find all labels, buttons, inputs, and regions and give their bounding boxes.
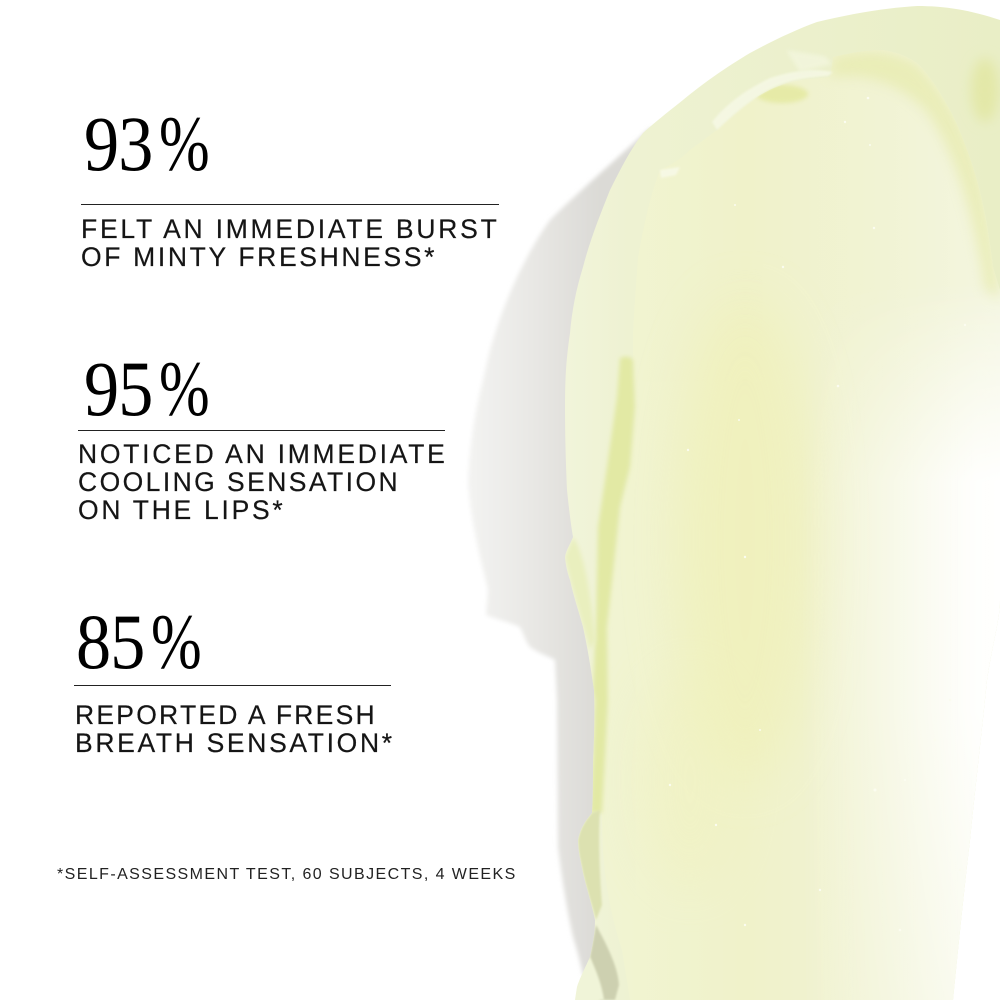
- percent sign: %: [151, 598, 202, 685]
- stat: 93%: [81, 100, 500, 272]
- number 95: 95: [84, 345, 152, 432]
- balm body: [550, 0, 1000, 1000]
- white highlight: [835, 336, 1000, 1000]
- lower side drip: [578, 810, 602, 920]
- left fold: [590, 357, 635, 813]
- number 85: 85: [76, 598, 144, 685]
- inner smear: [652, 52, 1000, 1000]
- cast shadow: [468, 128, 660, 975]
- bottom reflection: [590, 925, 619, 1000]
- lower left drip: [565, 537, 596, 650]
- label: NOTICED AN IMMEDIATE: [78, 439, 448, 469]
- lip highlight: [712, 70, 833, 130]
- sparkles: [669, 97, 966, 931]
- outer rim: [550, 0, 1000, 1000]
- yellow patch top right: [971, 58, 999, 122]
- label: OF MINTY FRESHNESS*: [81, 242, 437, 272]
- footnote: *SELF-ASSESSMENT TEST, 60 SUBJECTS, 4 WEEKS: [57, 866, 517, 883]
- yellow notch: [756, 85, 808, 103]
- yellow glow: [680, 319, 813, 755]
- label: [78, 439, 448, 525]
- stat: 85%: [74, 598, 395, 758]
- label: BREATH SENSATION*: [75, 728, 395, 758]
- percent sign: %: [159, 100, 210, 187]
- percent sign: %: [159, 345, 210, 432]
- top inner ridge shade: [830, 52, 1000, 300]
- balm swatch with shadow: [468, 6, 1000, 1000]
- label: [81, 214, 500, 272]
- label: ON THE LIPS*: [78, 495, 285, 525]
- number 93: 93: [84, 100, 152, 187]
- label: FELT AN IMMEDIATE BURST: [81, 214, 500, 244]
- label: REPORTED A FRESH: [75, 700, 377, 730]
- label: COOLING SENSATION: [78, 467, 400, 497]
- stat: 95%: [78, 345, 448, 525]
- label: [75, 700, 395, 758]
- notch at inner edge: [660, 167, 680, 178]
